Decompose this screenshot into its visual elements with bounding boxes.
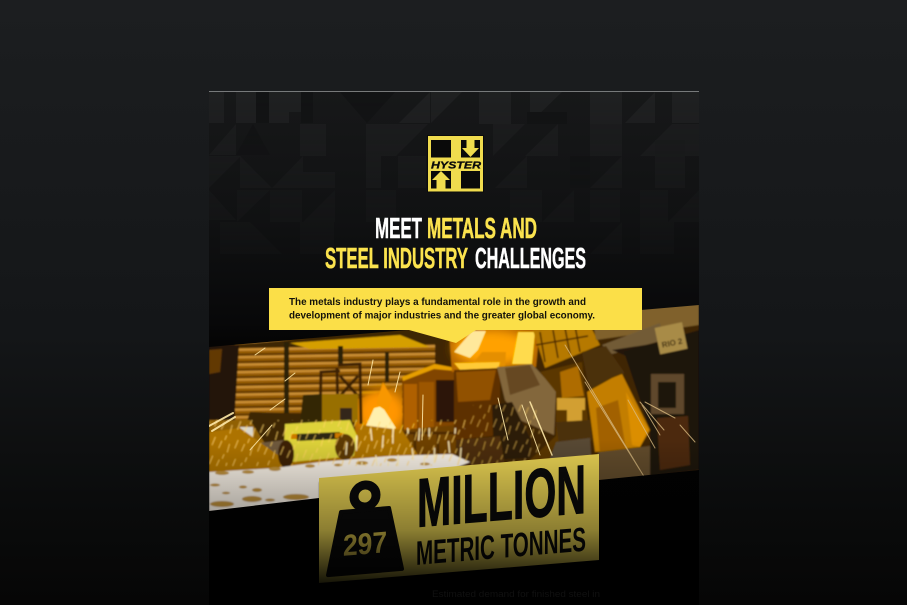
title words: STEEL INDUSTRY: STEEL INDUSTRY: [325, 243, 468, 275]
lower left of furnace: [454, 368, 500, 440]
furnace cabin: [401, 368, 455, 430]
floor flecks: [210, 458, 430, 507]
golden slab: [582, 346, 624, 392]
lower railing and dark hut base: [403, 426, 457, 456]
sparks: [209, 348, 552, 455]
panel: infographic: [209, 91, 699, 605]
callout: intro text: [269, 288, 642, 343]
logo bottom-left square with up arrow: [431, 171, 451, 188]
sign: RIO 2: [655, 322, 688, 354]
forklift mast: [320, 364, 361, 424]
shed roof: [234, 336, 436, 348]
sign: RIO 2: RIO 2: [661, 336, 684, 350]
molten flames top: [448, 330, 539, 372]
slag chute: [497, 364, 556, 435]
dark recess: [492, 402, 531, 460]
plates: [557, 398, 585, 410]
title: [325, 213, 586, 275]
stat: million: MILLION: [417, 450, 586, 542]
forklift wheels: [278, 440, 294, 468]
badge: 297 million metric tonnes: [319, 450, 599, 583]
upper right structure: [594, 305, 699, 341]
walkway railing upper: [533, 325, 600, 368]
far-right machinery: [624, 330, 699, 476]
corrugated shed wall: [235, 338, 435, 420]
intro text: [289, 296, 595, 322]
forklift body: [284, 420, 358, 462]
geometric background pattern: [209, 92, 699, 120]
intro text: The metals industry plays a fundamental role in the growth and: [289, 296, 586, 308]
panel background: [209, 92, 699, 605]
left dark wall: [209, 345, 239, 428]
title words: METALS AND: METALS AND: [427, 213, 537, 245]
logo bottom-right square: [461, 171, 480, 188]
orange flare behind forklift: [354, 384, 403, 434]
title word: CHALLENGES: CHALLENGES: [475, 243, 586, 275]
logo top-left square: [431, 140, 451, 158]
racks and stored material: [247, 411, 302, 422]
icon: weight: [328, 482, 402, 575]
golden spark band: [209, 425, 420, 476]
logo wordmark: HYSTER: [431, 160, 482, 172]
bottom fade overlay: [209, 440, 699, 605]
forklift cab: [300, 394, 322, 423]
photo base: [224, 324, 699, 498]
intro text: development of major industries and the greater global economy.: [289, 310, 595, 322]
logo top-right square with down arrow: [461, 140, 480, 158]
photo: steel plant with forklift: [209, 298, 699, 515]
weight value: 297: [343, 526, 387, 563]
title word: MEET: MEET: [375, 213, 422, 245]
stat: metric tonnes: METRIC TONNES: [416, 521, 586, 573]
spark texture: [209, 420, 469, 466]
inner recess: [530, 362, 588, 460]
sparks floor: [209, 454, 470, 512]
faint footer text: Estimated demand for finished steel in: [432, 589, 600, 600]
shed posts: [284, 342, 389, 414]
logo: Hyster: [427, 135, 484, 192]
